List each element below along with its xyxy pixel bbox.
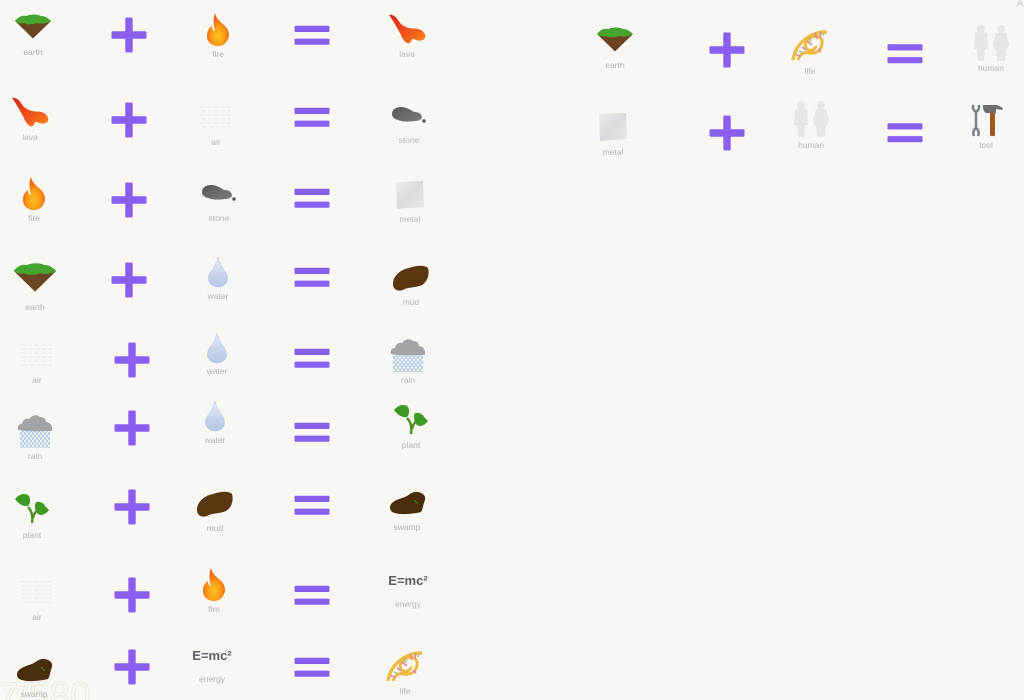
row 8: air + fire = energy: air [32,612,42,622]
row 4: earth + water = mud [14,257,429,312]
row 2: lava + air = stone [12,98,426,147]
right row 2: metal + human = tool: human [798,140,824,150]
row 1: earth + fire = lava [15,13,425,59]
row 3: fire + stone = metal: fire [28,213,40,223]
row 8: air + fire = energy: energy [395,599,422,609]
row 9: swamp + energy = life: swamp [21,689,48,699]
row 1: earth + fire = lava: lava [399,49,415,59]
row 8: air + fire = energy: E=mc² [388,573,428,588]
right row 1: earth + life = human: earth [605,60,625,70]
row 9: swamp + energy = life: life [400,686,411,696]
row 3: fire + stone = metal: stone [209,213,230,223]
row 5: air + water = rain: rain [401,375,415,385]
row 9: swamp + energy = life: energy [199,674,226,684]
row 5: air + water = rain: air [32,375,42,385]
row 2: lava + air = stone: stone [399,135,420,145]
right row 1: earth + life = human [597,25,1009,76]
row 7: plant + mud = swamp: plant [23,530,42,540]
right row 1: earth + life = human: human [978,63,1004,73]
right row 1: earth + life = human: life [805,66,816,76]
row 6: rain + water = plant: plant [402,440,421,450]
row 8: air + fire = energy: fire [208,604,220,614]
row 1: earth + fire = lava: fire [212,49,224,59]
row 4: earth + water = mud: mud [403,297,420,307]
row 6: rain + water = plant: rain [28,451,42,461]
row 4: earth + water = mud: earth [25,302,45,312]
row 5: air + water = rain [21,333,425,385]
right row 2: metal + human = tool [599,101,1003,157]
row 3: fire + stone = metal [23,177,424,224]
row 7: plant + mud = swamp: swamp [394,522,421,532]
row 6: rain + water = plant: water [204,435,226,445]
row 7: plant + mud = swamp: mud [207,523,224,533]
row 1: earth + fire = lava: earth [23,47,43,57]
row 9: swamp + energy = life: E=mc² [192,648,232,663]
right row 2: metal + human = tool: tool [979,140,993,150]
row 9: swamp + energy = life [17,648,422,699]
right row 2: metal + human = tool: metal [603,147,623,157]
row 7: plant + mud = swamp [15,490,425,540]
row 4: earth + water = mud: water [207,291,229,301]
row 2: lava + air = stone: lava [22,132,38,142]
row 2: lava + air = stone: air [211,137,221,147]
row 6: rain + water = plant [18,401,428,461]
row 8: air + fire = energy [21,568,428,622]
row 3: fire + stone = metal: metal [400,214,420,224]
row 5: air + water = rain: water [206,366,228,376]
